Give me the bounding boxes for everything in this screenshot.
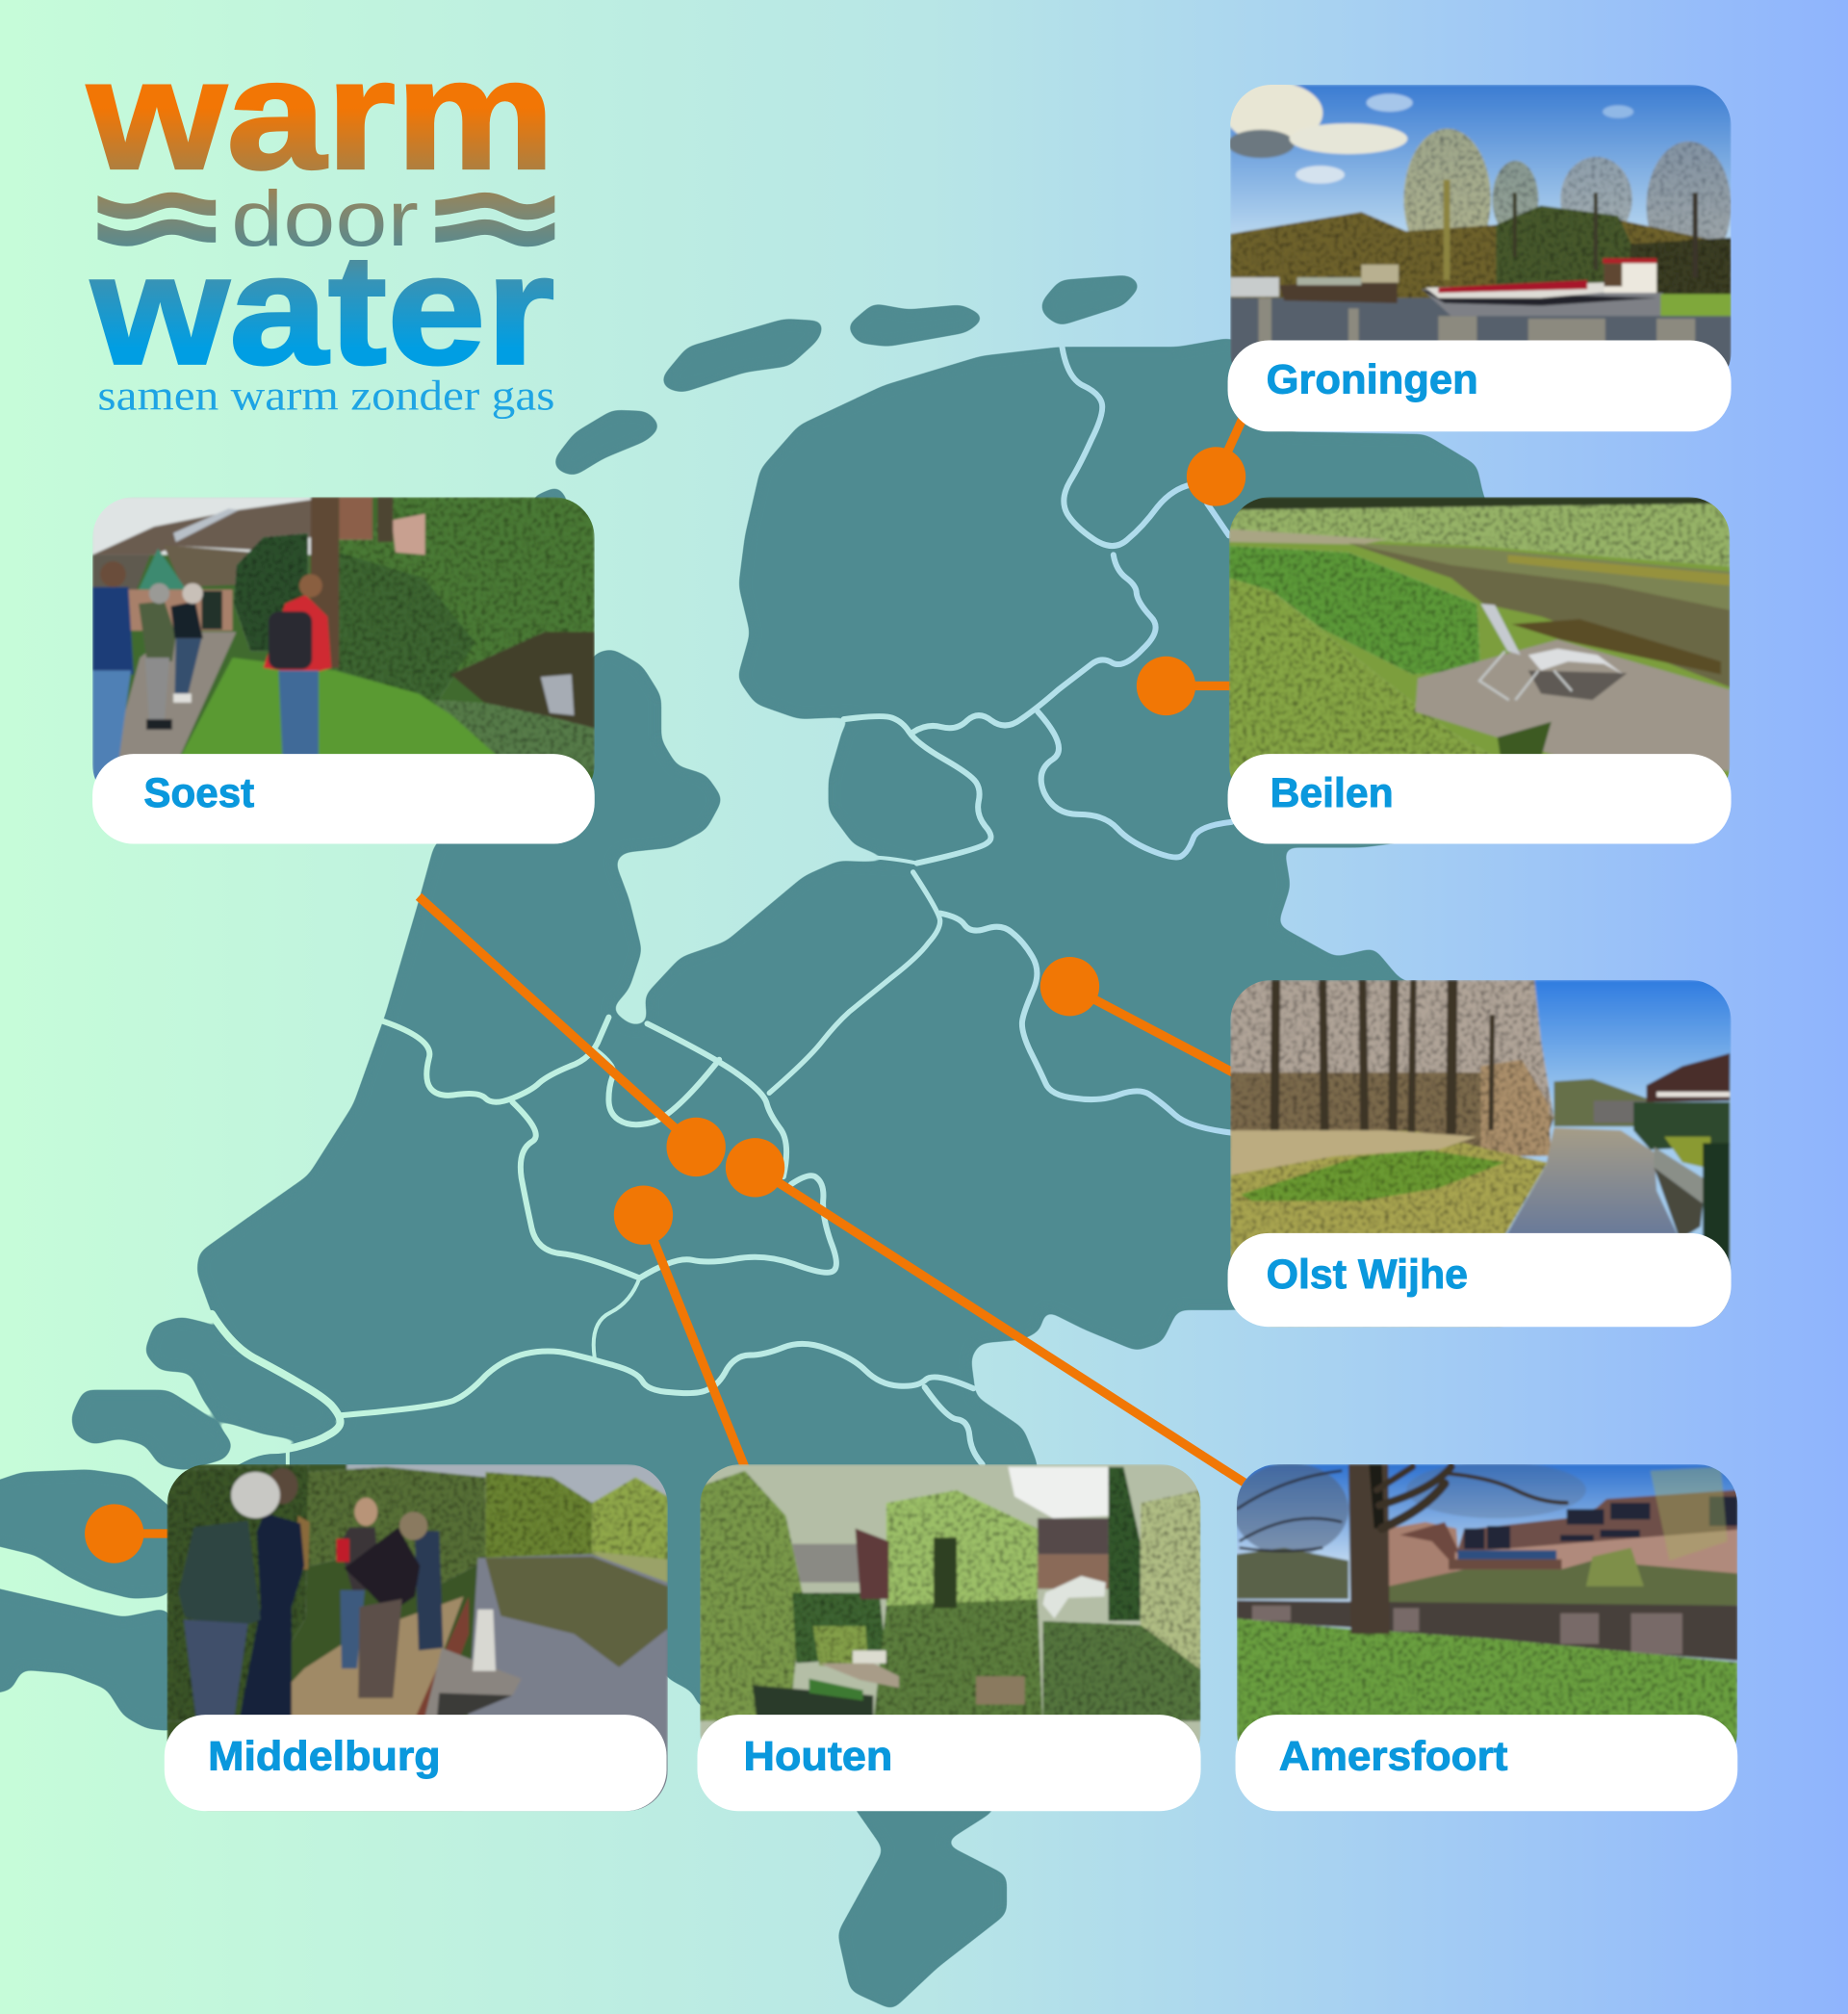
label: Amersfoort <box>1236 1715 1737 1811</box>
label: Olst Wijhe <box>1228 1233 1732 1327</box>
marker: Amersfoort <box>726 1138 784 1197</box>
label: Middelburg: Middelburg <box>208 1734 441 1780</box>
line: Beilen <box>1167 683 1240 689</box>
card: Olst Wijhe <box>1228 980 1732 1336</box>
card: Groningen <box>1225 82 1732 431</box>
line: Soest <box>419 896 696 1147</box>
logo word: door: door <box>231 175 419 263</box>
label: Amersfoort: Amersfoort <box>1279 1734 1507 1780</box>
card: Beilen <box>1228 497 1732 844</box>
card: Middelburg <box>165 1464 668 1811</box>
label: Middelburg <box>165 1715 666 1811</box>
marker: Houten <box>614 1185 673 1245</box>
label: Beilen <box>1228 754 1732 844</box>
label: Soest <box>92 754 595 844</box>
line: Olst Wijhe <box>1069 987 1236 1073</box>
photo: Middelburg group <box>167 1464 668 1811</box>
card: Soest <box>92 497 595 844</box>
label: Houten <box>698 1715 1201 1811</box>
photo: Amersfoort pond <box>1236 1464 1738 1744</box>
line: Middelburg <box>115 1531 173 1537</box>
photo: Groningen canal <box>1230 85 1732 367</box>
map land masses <box>0 275 1541 2010</box>
marker: Soest <box>666 1118 726 1176</box>
marker: Olst Wijhe <box>1040 957 1099 1016</box>
map of the Netherlands <box>0 275 1541 2010</box>
line: Houten <box>643 1215 746 1471</box>
photo: Olst Wijhe stream <box>1230 980 1732 1336</box>
logo <box>85 83 554 419</box>
line: Amersfoort <box>756 1168 1245 1484</box>
label: Beilen: Beilen <box>1270 770 1394 816</box>
card: Amersfoort <box>1233 1461 1737 1811</box>
logo waves <box>90 200 562 239</box>
location markers <box>85 447 1245 1563</box>
label: Olst Wijhe: Olst Wijhe <box>1267 1252 1468 1298</box>
label: Groningen <box>1228 341 1732 431</box>
logo word: warm: warm <box>87 28 554 202</box>
label: Groningen: Groningen <box>1267 356 1478 402</box>
connector lines <box>115 418 1245 1534</box>
label: Soest: Soest <box>143 770 254 816</box>
photo: Soest group <box>92 497 595 806</box>
logo word: water: water <box>90 223 554 398</box>
label: Houten: Houten <box>744 1734 892 1780</box>
province borders and rivers <box>212 347 1233 1467</box>
photo: Houten garden <box>700 1464 1201 1772</box>
photo: Beilen jetty <box>1229 497 1730 806</box>
marker: Groningen <box>1187 447 1245 506</box>
line: Groningen <box>1217 418 1244 477</box>
card: Houten <box>698 1464 1201 1811</box>
marker: Beilen <box>1137 657 1195 715</box>
marker: Middelburg <box>85 1504 143 1563</box>
logo tagline: samen warm zonder gas <box>97 373 554 420</box>
